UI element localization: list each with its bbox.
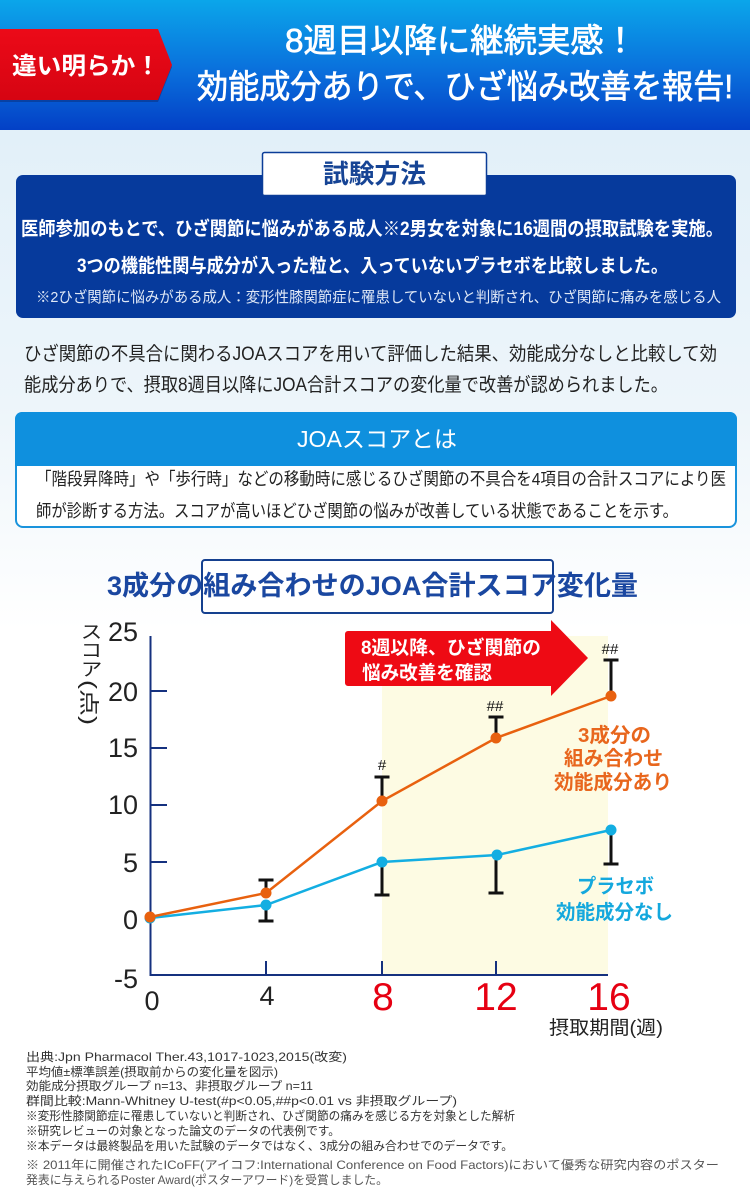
- result paragraph: [24, 342, 717, 396]
- title: 効能成分ありで、ひざ悩み改善を報告!: [197, 68, 733, 105]
- page background: [0, 130, 750, 630]
- active line: [144, 690, 616, 922]
- result paragraph: 能成分ありで、摂取8週目以降にJOA合計スコアの変化量で改善が認められました。: [24, 374, 668, 396]
- chart heading: [107, 560, 638, 613]
- header banner: [0, 0, 750, 130]
- x axis labels: 16: [587, 976, 631, 1019]
- footnotes: 群間比較:Mann-Whitney U-test(#p<0.05,##p<0.01 vs 非摂取グループ): [26, 1093, 457, 1108]
- active label: 組み合わせ: [564, 747, 663, 770]
- arrow callout: 8週以降、ひざ関節の: [361, 636, 541, 659]
- footnotes: ※変形性膝関節症に罹患していないと判断され、ひざ関節の痛みを感じる方を対象とした解析: [26, 1108, 515, 1123]
- footnotes: 平均値±標準誤差(摂取前からの変化量を図示): [26, 1064, 278, 1079]
- footnotes: ※本データは最終製品を用いた試験のデータではなく、3成分の組み合わせでのデータです。: [26, 1138, 513, 1153]
- method text: 3つの機能性関与成分が入った粒と、入っていないプラセボを比較しました。: [77, 254, 668, 277]
- panel: JOA score: [15, 412, 737, 527]
- x axis labels: 0: [144, 986, 160, 1016]
- error bars: [258, 660, 618, 921]
- footnotes: [26, 1049, 719, 1187]
- y axis labels: 25: [108, 617, 138, 647]
- significance marks: ##: [602, 641, 619, 658]
- y axis labels: 5: [123, 848, 138, 878]
- badge: 違い明らか: [0, 29, 172, 102]
- active label: [554, 723, 672, 794]
- title: [197, 22, 733, 105]
- significance marks: [378, 641, 619, 774]
- footnotes: 効能成分摂取グループ n=13、非摂取グループ n=11: [26, 1078, 313, 1093]
- arrow callout: 悩み改善を確認: [362, 662, 492, 684]
- active label: 効能成分あり: [554, 770, 672, 794]
- footnotes: 出典:Jpn Pharmacol Ther.43,1017-1023,2015(改変): [26, 1049, 347, 1064]
- y axis labels: -5: [114, 964, 138, 994]
- axes: [150, 636, 608, 975]
- panel heading: 試験方法: [323, 159, 426, 189]
- x axis title: 摂取期間(週): [549, 1017, 663, 1039]
- y axis labels: 15: [108, 733, 138, 763]
- y axis labels: 10: [108, 790, 138, 820]
- placebo label: プラセボ: [577, 875, 654, 898]
- footnotes: ※研究レビューの対象となった論文のデータの代表例です。: [26, 1123, 340, 1138]
- y axis title: [77, 622, 102, 725]
- x axis labels: [144, 976, 631, 1019]
- significance marks: #: [378, 757, 387, 774]
- line chart: [77, 617, 673, 1039]
- footnotes: ※ 2011年に開催されたICoFF(アイコフ:International Conference on Food Factors)において優秀な研究内容のポスター: [26, 1158, 719, 1172]
- placebo line: [144, 824, 616, 924]
- badge: 違い明らか: 違い明らか！: [12, 53, 160, 80]
- x axis labels: 8: [372, 976, 394, 1019]
- x axis labels: 12: [474, 976, 518, 1019]
- y axis title: スコア: [78, 622, 102, 678]
- placebo label: 効能成分なし: [556, 900, 673, 924]
- title: 8週目以降に継続実感！: [285, 22, 637, 59]
- panel heading: [262, 152, 486, 196]
- panel: test method: [16, 152, 736, 318]
- y axis labels: 0: [123, 905, 138, 935]
- arrow callout: [345, 620, 588, 696]
- JOA heading: JOAスコアとは: [297, 426, 457, 452]
- method text: [21, 217, 723, 306]
- method text: ※2ひざ関節に悩みがある成人：変形性膝関節症に罹患していないと判断され、ひざ関節に痛みを感じる人: [36, 288, 721, 306]
- highlight band: [382, 636, 608, 975]
- placebo label: [556, 875, 673, 924]
- y axis labels: 20: [108, 677, 138, 707]
- footnotes: 発表に与えられるPoster Award(ポスターアワード)を受賞しました。: [26, 1173, 388, 1187]
- JOA description: [36, 469, 726, 521]
- y axis title: (点): [77, 680, 100, 725]
- JOA description: 師が診断する方法。スコアが高いほどひざ関節の悩みが改善している状態であることを示す。: [36, 501, 678, 521]
- significance marks: ##: [487, 698, 504, 715]
- active label: 3成分の: [578, 723, 651, 747]
- y axis labels: [108, 617, 138, 994]
- x axis labels: 4: [259, 981, 275, 1011]
- chart heading: 3成分の組み合わせのJOA合計スコア変化量: [107, 571, 638, 601]
